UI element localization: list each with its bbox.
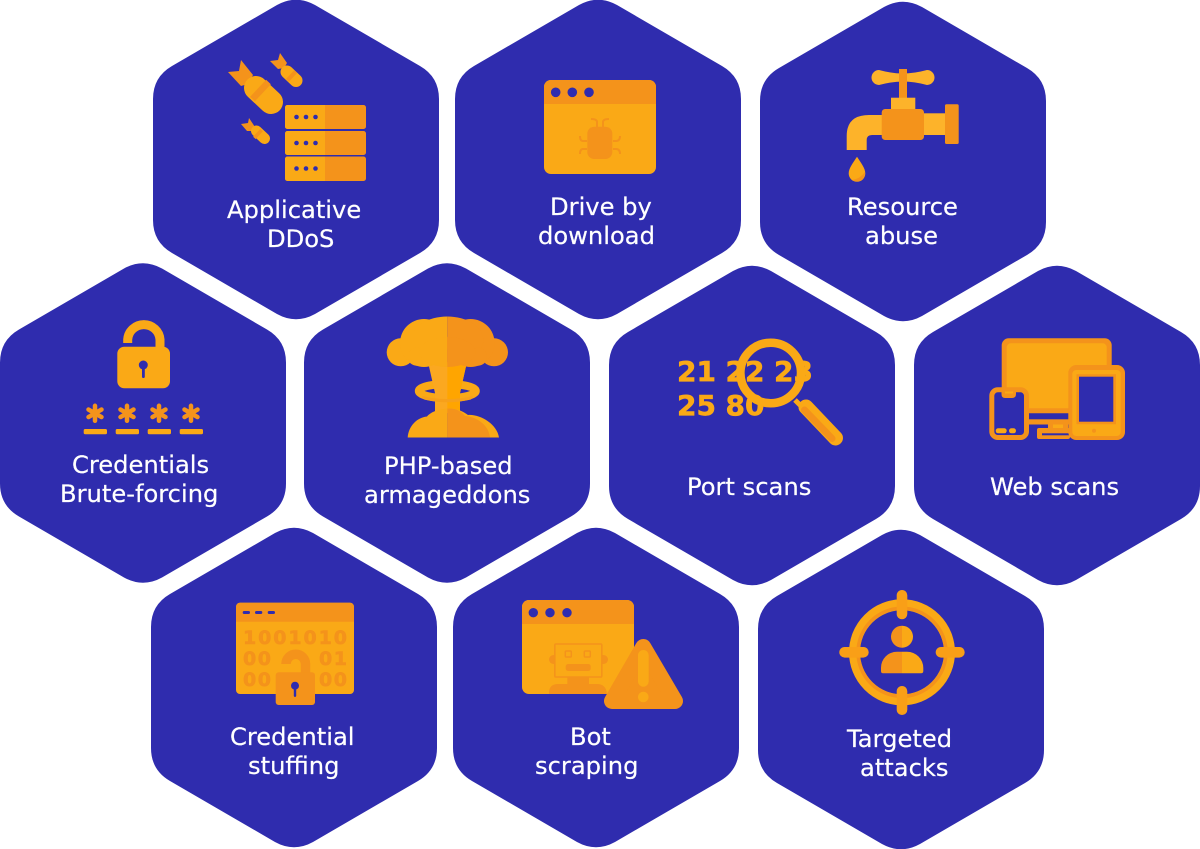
hexagon background bbox=[914, 266, 1200, 585]
icon: padlock and hidden password bbox=[84, 325, 203, 434]
icon: browser with robot and warning triangle bbox=[522, 600, 675, 702]
icon: bombs hitting server bbox=[228, 53, 366, 181]
panel: Targeted attacks bbox=[758, 530, 1044, 849]
hexagon background bbox=[453, 528, 739, 847]
hexagon background bbox=[609, 266, 895, 585]
icon: port numbers under magnifying glass: 22 bbox=[726, 355, 764, 388]
label: Resource bbox=[847, 193, 958, 221]
label: Web scans bbox=[990, 473, 1119, 501]
label: Drive by bbox=[550, 193, 652, 221]
icon: binary browser with open lock: 00 bbox=[319, 669, 347, 691]
icon: port numbers under magnifying glass: 80 bbox=[726, 389, 764, 422]
icon: crosshair on person bbox=[839, 590, 965, 715]
icon: binary browser with open lock: 1001010 bbox=[243, 627, 347, 649]
icon: binary browser with open lock: 00 bbox=[243, 669, 271, 691]
hexagon background bbox=[151, 528, 437, 847]
icon: port numbers under magnifying glass bbox=[677, 343, 836, 438]
icon: binary browser with open lock: 00 bbox=[243, 648, 271, 670]
label: Brute-forcing bbox=[60, 480, 218, 508]
label: Targeted bbox=[846, 725, 952, 753]
panel: Port scans bbox=[609, 266, 895, 585]
label: armageddons bbox=[364, 481, 530, 509]
panel: PHP-based armageddons bbox=[304, 263, 590, 583]
icon: binary browser with open lock bbox=[236, 603, 354, 705]
label: stuffing bbox=[248, 752, 339, 780]
panel: Credentials Brute-forcing bbox=[0, 263, 286, 583]
hexagon background bbox=[760, 2, 1046, 321]
panel: Credential stuffing bbox=[151, 528, 437, 847]
panel: Bot scraping bbox=[453, 528, 739, 847]
label: download bbox=[538, 222, 655, 250]
icon: port numbers under magnifying glass: 23 bbox=[774, 355, 813, 388]
label: DDoS bbox=[267, 225, 334, 253]
label: PHP-based bbox=[384, 452, 513, 480]
icon: dripping faucet bbox=[847, 69, 959, 182]
panel: Web scans bbox=[914, 266, 1200, 585]
icon: binary browser with open lock: 01 bbox=[319, 648, 347, 670]
icon: port numbers under magnifying glass: 21 bbox=[677, 355, 716, 388]
icon: monitor, phone and tablet bbox=[992, 338, 1125, 440]
label: abuse bbox=[865, 222, 938, 250]
hexagon background bbox=[758, 530, 1044, 849]
label: attacks bbox=[860, 754, 949, 782]
label: Credentials bbox=[72, 451, 209, 479]
label: scraping bbox=[535, 752, 638, 780]
hexagon background bbox=[153, 0, 439, 319]
hexagon background bbox=[0, 263, 286, 583]
icon: port numbers under magnifying glass: 25 bbox=[677, 389, 716, 422]
label: Bot bbox=[570, 723, 611, 751]
panel: Drive by download bbox=[455, 0, 741, 319]
label: Applicative bbox=[227, 196, 361, 224]
panel: Resource abuse bbox=[760, 2, 1046, 321]
icon: browser with bug bbox=[544, 80, 656, 174]
icon: mushroom cloud bbox=[387, 316, 508, 438]
panel: Applicative DDoS bbox=[153, 0, 439, 319]
label: Port scans bbox=[687, 473, 811, 501]
hexagon background bbox=[455, 0, 741, 319]
label: Credential bbox=[230, 723, 354, 751]
hexagon background bbox=[304, 263, 590, 583]
